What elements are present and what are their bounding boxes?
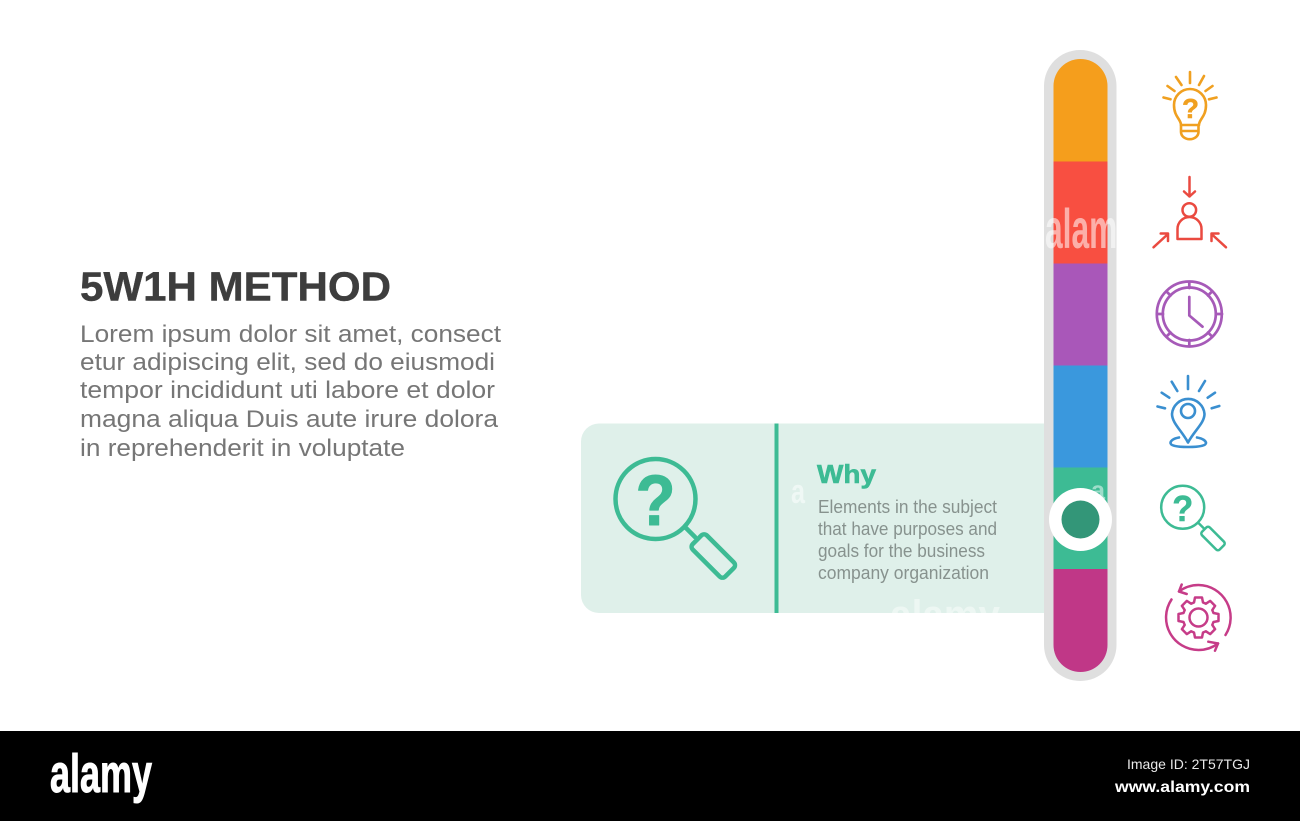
divider <box>774 424 778 613</box>
intro text block: in reprehenderit in voluptate <box>80 435 405 462</box>
watermark marks: alamy <box>890 593 1001 637</box>
icon: light bulb question <box>1164 72 1216 139</box>
vertical segmented bar: a <box>1091 475 1106 505</box>
intro text block: Lorem ipsum dolor sit amet, consect <box>80 321 501 348</box>
icon: person with arrows <box>1154 177 1226 247</box>
image id: Image ID: 2T57TGJ <box>1127 756 1250 772</box>
description: company organization <box>818 563 989 583</box>
description: Elements in the subject <box>818 497 997 517</box>
vertical segmented bar <box>1044 50 1116 681</box>
icon: location pin <box>1158 376 1219 447</box>
footer band <box>0 731 1300 821</box>
watermark on bar: alamy <box>1045 197 1135 260</box>
website: www.alamy.com <box>1114 779 1250 796</box>
title: 5W1H METHOD <box>80 264 391 310</box>
intro text block: magna aliqua Duis aute irure dolora <box>80 406 499 433</box>
alamy logo: alamy <box>50 744 152 804</box>
icon: small magnifier <box>1161 486 1226 551</box>
icon: large magnifier with question mark: ? <box>636 462 676 541</box>
icon: large magnifier with question mark <box>616 459 737 579</box>
panel: why <box>581 424 1046 613</box>
intro text block <box>80 321 501 462</box>
heading: why: Why <box>817 459 877 489</box>
description: goals for the business <box>818 541 985 561</box>
watermark marks: a <box>791 473 806 511</box>
intro text block: etur adipiscing elit, sed do eiusmodi <box>80 349 495 376</box>
description: that have purposes and <box>818 519 997 539</box>
description <box>818 497 997 583</box>
icon: clock <box>1157 282 1222 346</box>
selected marker <box>1049 488 1112 551</box>
intro text block: tempor incididunt uti labore et dolor <box>80 377 495 404</box>
icon: light bulb question: ? <box>1182 93 1199 124</box>
icon: gear with cycle arrows <box>1166 584 1231 651</box>
watermark marks <box>791 473 1001 637</box>
icon: small magnifier: ? <box>1172 488 1193 529</box>
